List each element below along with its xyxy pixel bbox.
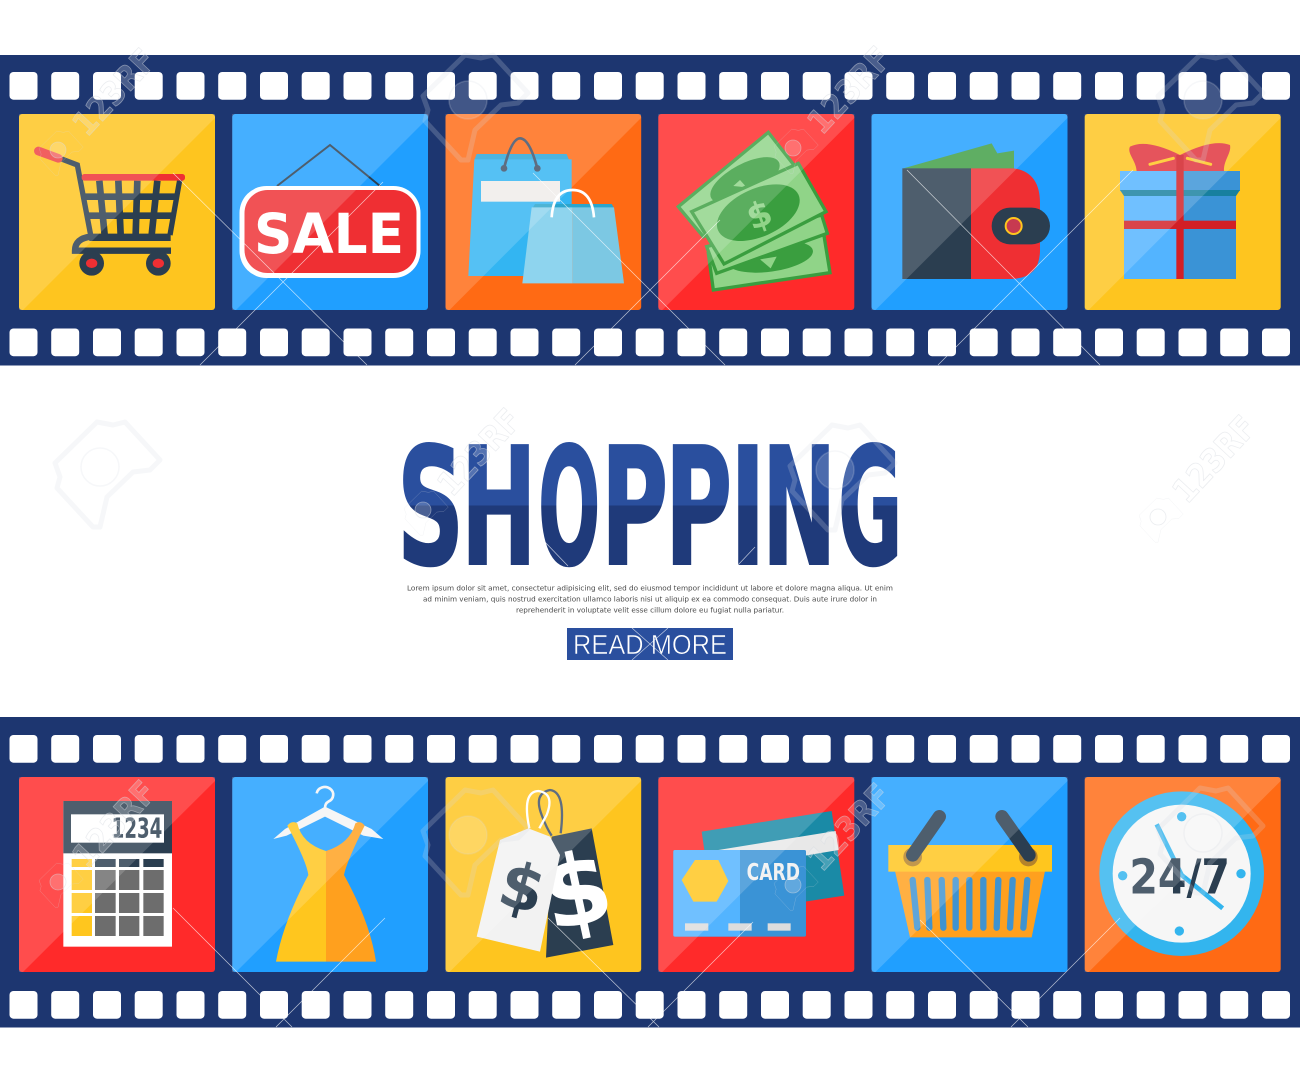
button: read more: READ MORE	[573, 629, 727, 660]
icon: calculator	[63, 801, 172, 947]
watermark: large outlines	[55, 55, 1263, 895]
panel: shopping cart	[19, 114, 215, 310]
panel: gift box	[1085, 114, 1281, 310]
panel: banknotes	[658, 114, 854, 310]
title: I	[730, 414, 765, 603]
icon: sale sign: SALE	[254, 202, 404, 266]
icon: credit cards	[673, 811, 844, 937]
icon: dress on hanger	[273, 787, 383, 962]
panel: sale sign	[232, 114, 428, 310]
title: N	[762, 414, 837, 603]
title: S	[397, 414, 464, 603]
icon: banknotes	[678, 132, 830, 290]
icon: price tags: $	[532, 829, 622, 955]
panel: price tags	[446, 777, 641, 972]
title: H	[461, 414, 537, 603]
title: P	[665, 414, 732, 603]
watermark: 123RF logos: 123RF	[799, 39, 899, 141]
icon: shopping bags	[468, 138, 624, 283]
title	[397, 414, 902, 603]
watermark: 123RF logos: 123RF	[1164, 408, 1264, 510]
icon: sale sign	[240, 145, 420, 278]
text block: lorem ipsum: Lorem ipsum dolor sit amet, consectetur adipisicing elit, sed do eiusmod tempor incididunt ut labore et dolore magna aliqua. Ut enim	[407, 584, 893, 592]
title: G	[838, 414, 902, 603]
watermark: 123RF logos: 123RF	[429, 401, 529, 503]
icon: 24/7 clock: 24/7	[1129, 849, 1230, 905]
text block: lorem ipsum: ad minim veniam, quis nostrud exercitation ullamco laboris nisi ut aliquip ex ea commodo consequat. Duis aute irure dolor in	[423, 594, 877, 604]
watermark: 123RF logos	[39, 39, 1264, 910]
panel: dress on hanger	[232, 777, 428, 972]
watermark: 123RF logos: 123RF	[64, 773, 164, 875]
panel: wallet	[872, 114, 1068, 310]
film strip: top	[0, 55, 1300, 366]
panel: basket	[872, 777, 1068, 972]
watermark: 123RF logos: 123RF	[64, 41, 164, 143]
text block: lorem ipsum	[407, 584, 893, 614]
icon: basket	[888, 817, 1052, 937]
panel: credit cards	[658, 777, 854, 972]
text block: lorem ipsum: reprehenderit in voluptate velit esse cillum dolore eu fugiat nulla pariatur.	[516, 606, 784, 614]
film strip: bottom	[0, 717, 1300, 1028]
panel: 24/7 clock	[1085, 777, 1281, 972]
icon: price tags	[477, 790, 622, 958]
icon: price tags: $	[491, 846, 553, 929]
icon: banknotes: $	[741, 193, 778, 239]
icon: credit cards: CARD	[747, 860, 800, 886]
panel: shopping bags	[446, 114, 641, 310]
icon: calculator: 1234	[112, 814, 162, 845]
title: O	[538, 414, 600, 603]
icon: wallet	[902, 143, 1050, 279]
panel: calculator	[19, 777, 215, 972]
icon: 24/7 clock	[1099, 791, 1264, 956]
watermark: 123RF logos: 123RF	[799, 776, 899, 878]
title: P	[601, 414, 668, 603]
icon: shopping cart	[38, 151, 185, 276]
icon: gift box	[1120, 143, 1240, 279]
